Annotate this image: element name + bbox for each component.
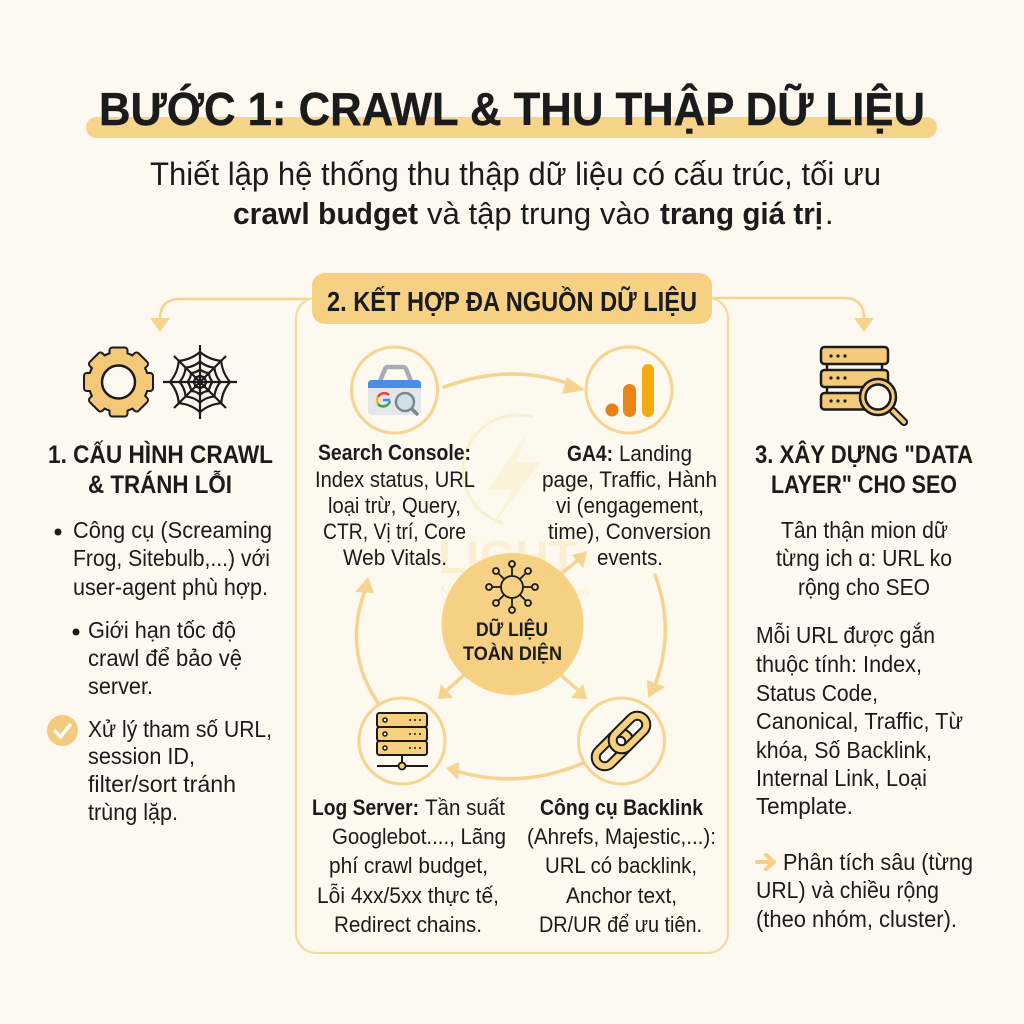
hub: comprehensive data: DỮ LIỆU bbox=[476, 619, 548, 641]
icon: data network bbox=[486, 561, 538, 613]
bullet: tools: user-agent phù hợp. bbox=[73, 574, 268, 600]
panel heading: 2. KẾT HỢP ĐA NGUỒN DỮ LIỆU bbox=[327, 286, 697, 317]
text: url attributes: khóa, Số Backlink, bbox=[756, 737, 932, 763]
heading: step 3: 3. XÂY DỰNG "DATA bbox=[755, 439, 973, 469]
heading: step 1: & TRÁNH LỖI bbox=[88, 469, 232, 499]
heading: step 1 bbox=[48, 440, 273, 499]
text: analysis depth bbox=[756, 849, 973, 932]
panel heading bbox=[312, 273, 712, 324]
heading: step 3 bbox=[755, 439, 973, 499]
icon: gear bbox=[85, 348, 152, 416]
text: analysis depth: Phân tích sâu (từng bbox=[783, 849, 973, 875]
hub: comprehensive data: TOÀN DIỆN bbox=[463, 643, 562, 665]
subtitle bbox=[150, 156, 881, 231]
hub: comprehensive data bbox=[442, 553, 584, 695]
heading: step 3: LAYER" CHO SEO bbox=[771, 471, 957, 499]
source: search console text: loại trừ, Query, bbox=[328, 493, 461, 518]
text: url attributes: Internal Link, Loại bbox=[756, 765, 927, 791]
source: log server text: Googlebot...., Lãng bbox=[332, 824, 506, 849]
bullet: url parameters bbox=[47, 715, 272, 825]
heading: step 1: 1. CẤU HÌNH CRAWL bbox=[48, 440, 273, 469]
source: backlink icon bbox=[578, 698, 664, 784]
bullet: url parameters: trùng lặp. bbox=[88, 799, 178, 825]
text: url attributes: Canonical, Traffic, Từ bbox=[756, 708, 963, 734]
subtitle: crawl budget bbox=[233, 196, 418, 231]
source: search console icon bbox=[352, 347, 438, 433]
source: search console text: CTR, Vị trí, Core bbox=[323, 519, 466, 544]
source: backlink text: URL có backlink, bbox=[545, 853, 697, 878]
text: data layer intro: Tân thận mion dữ bbox=[781, 517, 948, 543]
text: data layer intro: từng ich ɑ: URL ko bbox=[776, 545, 952, 571]
icon: spider web bbox=[163, 345, 237, 419]
icon: database with magnifier bbox=[821, 347, 904, 422]
source: search console text: Index status, URL bbox=[315, 467, 475, 492]
bullet: crawl rate: Giới hạn tốc độ bbox=[88, 617, 236, 643]
arrow: to step 1 bbox=[150, 299, 312, 332]
source: backlink text bbox=[527, 795, 716, 937]
source: backlink text: Anchor text, bbox=[566, 883, 677, 908]
subtitle: và tập trung vào bbox=[427, 196, 650, 231]
subtitle: . bbox=[825, 196, 834, 231]
watermark logo bbox=[438, 415, 589, 599]
source: log server text: Log Server: bbox=[312, 795, 419, 820]
source: ga4 text: vi (engagement, bbox=[556, 493, 704, 518]
text: analysis depth: (theo nhóm, cluster). bbox=[756, 906, 957, 932]
bullet: crawl rate: crawl để bảo vệ bbox=[88, 645, 242, 671]
subtitle: trang giá trị bbox=[660, 196, 823, 231]
title: BƯỚC 1: CRAWL & THU THẬP DỮ LIỆU bbox=[99, 83, 925, 135]
bullet: url parameters: Xử lý tham số URL, bbox=[88, 716, 272, 742]
bullet: tools: Frog, Sitebulb,...) với bbox=[73, 545, 270, 571]
bullet: tools: Công cụ (Screaming bbox=[73, 517, 272, 543]
watermark logo: LIGHT bbox=[438, 531, 577, 583]
source: ga4 text: events. bbox=[597, 545, 663, 570]
arrow: backlink to log server bbox=[446, 762, 583, 780]
source: log server text bbox=[312, 795, 506, 937]
subtitle: Thiết lập hệ thống thu thập dữ liệu có cấu trúc, tối ưu bbox=[150, 156, 881, 192]
bullet: crawl rate bbox=[72, 617, 242, 699]
arrow: log server to search console bbox=[355, 577, 378, 703]
source: ga4 text: page, Traffic, Hành bbox=[542, 467, 717, 492]
text: analysis depth: URL) và chiều rộng bbox=[756, 877, 939, 903]
text: url attributes: thuộc tính: Index, bbox=[756, 651, 922, 677]
source: log server icon bbox=[359, 698, 445, 784]
source: backlink text: DR/UR để ưu tiên. bbox=[539, 912, 702, 937]
source: log server text: Redirect chains. bbox=[334, 912, 482, 937]
source: search console text bbox=[315, 440, 475, 570]
watermark logo: Nhóm Kinh doanh Shop bbox=[440, 584, 589, 599]
source: log server text: Tần suất bbox=[425, 795, 505, 820]
bullet: url parameters: filter/sort tránh bbox=[88, 771, 236, 797]
source: backlink text: Công cụ Backlink bbox=[540, 795, 704, 820]
source: ga4 icon bbox=[586, 347, 672, 433]
arrow: ga4 to backlink bbox=[647, 575, 665, 698]
text: url attributes: Template. bbox=[756, 793, 853, 819]
bullet: url parameters: session ID, bbox=[88, 743, 195, 769]
source: ga4 text: GA4: bbox=[567, 441, 613, 466]
source: search console text: Search Console: bbox=[318, 440, 471, 465]
source: ga4 text: time), Conversion bbox=[548, 519, 711, 544]
text: url attributes bbox=[756, 622, 963, 819]
source: backlink text: (Ahrefs, Majestic,...): bbox=[527, 824, 716, 849]
text: data layer intro: rộng cho SEO bbox=[798, 574, 930, 600]
panel: data sources bbox=[296, 273, 728, 953]
source: ga4 text: Landing bbox=[619, 441, 692, 466]
text: url attributes: Status Code, bbox=[756, 680, 878, 706]
source: search console text: Web Vitals. bbox=[343, 545, 447, 570]
arrows: hub outward bbox=[438, 551, 587, 699]
source: ga4 text bbox=[542, 441, 717, 570]
text: data layer intro bbox=[776, 517, 952, 600]
bullet: tools bbox=[54, 517, 272, 600]
text: url attributes: Mỗi URL được gắn bbox=[756, 622, 935, 648]
source: log server text: phí crawl budget, bbox=[329, 853, 488, 878]
arrow: search console to ga4 bbox=[444, 374, 585, 394]
bullet: crawl rate: server. bbox=[88, 673, 153, 699]
source: log server text: Lỗi 4xx/5xx thực tế, bbox=[317, 883, 499, 908]
arrow: to step 3 bbox=[712, 298, 874, 332]
